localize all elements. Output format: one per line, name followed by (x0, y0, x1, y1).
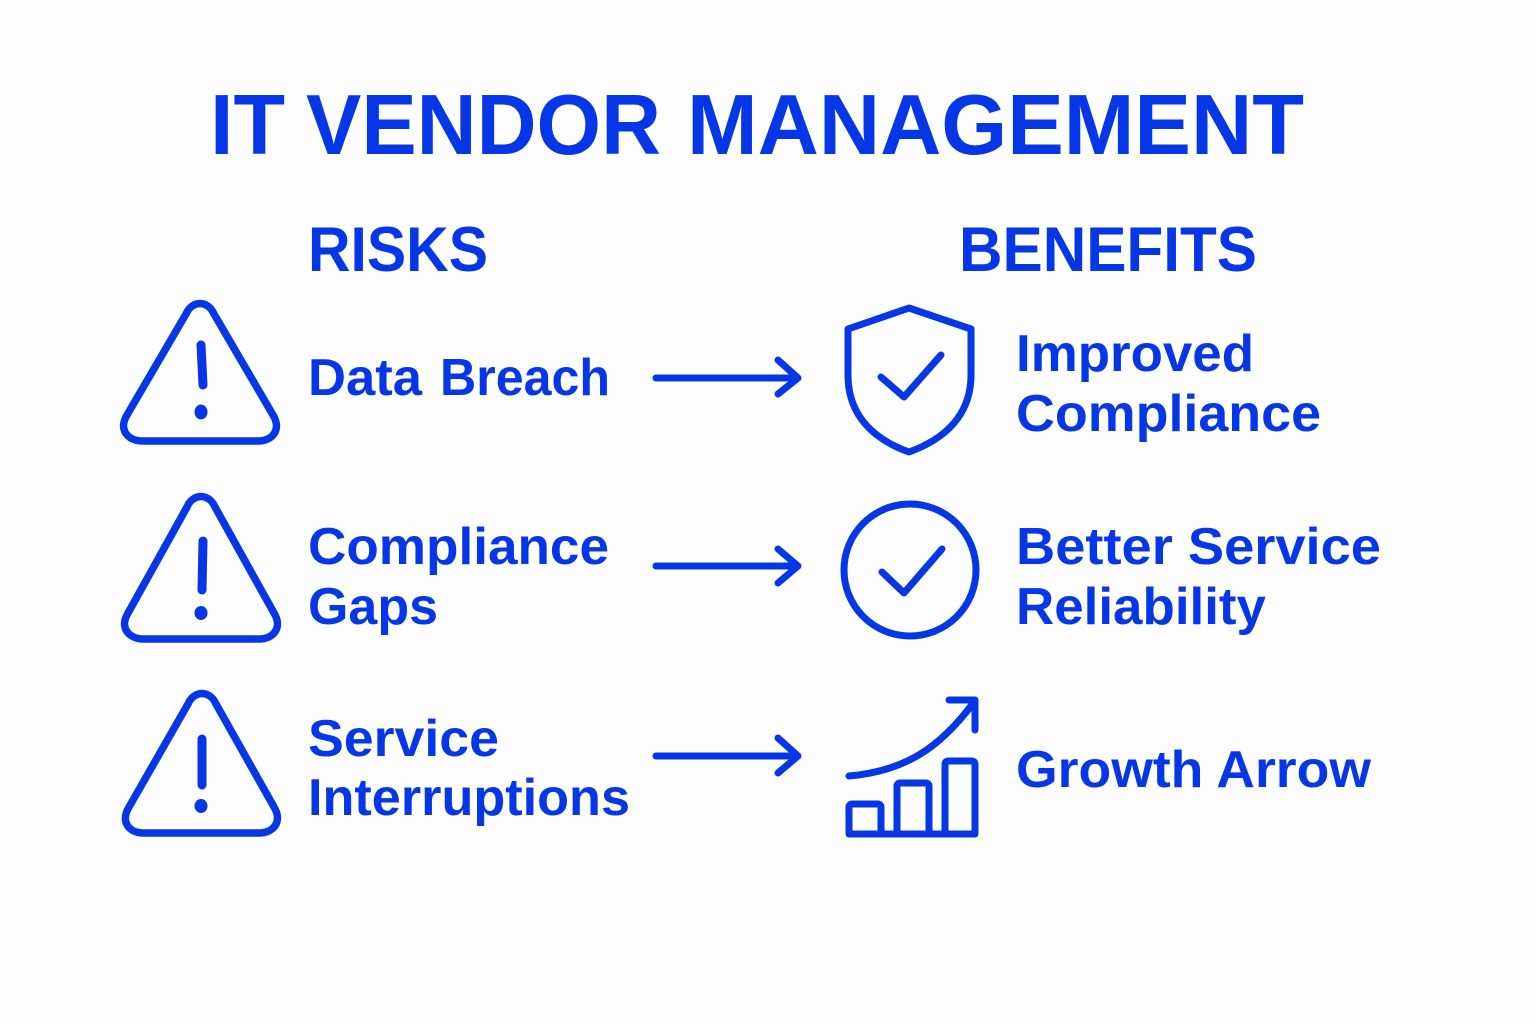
arrow 1 (656, 360, 798, 394)
benefit label: improved compliance: Compliance (1016, 385, 1321, 443)
heading: risks: RISKS (308, 215, 488, 285)
risk label: compliance gaps: Gaps (308, 578, 438, 636)
icon: shield check (848, 308, 971, 452)
arrow 2 (656, 549, 798, 583)
arrow 3 (656, 738, 798, 773)
benefit label: growth arrow: Growth Arrow (1016, 741, 1372, 799)
risk label: service interruptions: Interruptions (308, 769, 630, 827)
benefit label: improved compliance: Improved (1016, 325, 1254, 383)
risk label: service interruptions: Service (308, 710, 499, 768)
risk label: service interruptions (308, 710, 630, 827)
title: VENDOR (306, 78, 661, 173)
risk label: compliance gaps (308, 518, 609, 636)
risk label: compliance gaps: Compliance (308, 518, 609, 576)
icon: circle check (844, 504, 976, 636)
title (210, 78, 1304, 173)
icon: warning triangle 2 (125, 496, 277, 639)
heading: benefits: BENEFITS (959, 215, 1257, 285)
icon: growth chart (849, 700, 975, 834)
risk label: data breach: Data (308, 349, 423, 407)
title: IT (210, 78, 285, 173)
icon: warning triangle 1 (124, 304, 276, 441)
benefit label: better service reliability (1016, 518, 1381, 636)
benefit label: better service reliability: Reliability (1016, 578, 1266, 636)
title: MANAGEMENT (687, 78, 1304, 173)
benefit label: improved compliance (1016, 325, 1321, 443)
icon: warning triangle 3 (125, 694, 277, 833)
risk label: data breach (308, 349, 610, 407)
risk label: data breach: Breach (440, 349, 610, 407)
benefit label: better service reliability: Better Service (1016, 518, 1381, 576)
